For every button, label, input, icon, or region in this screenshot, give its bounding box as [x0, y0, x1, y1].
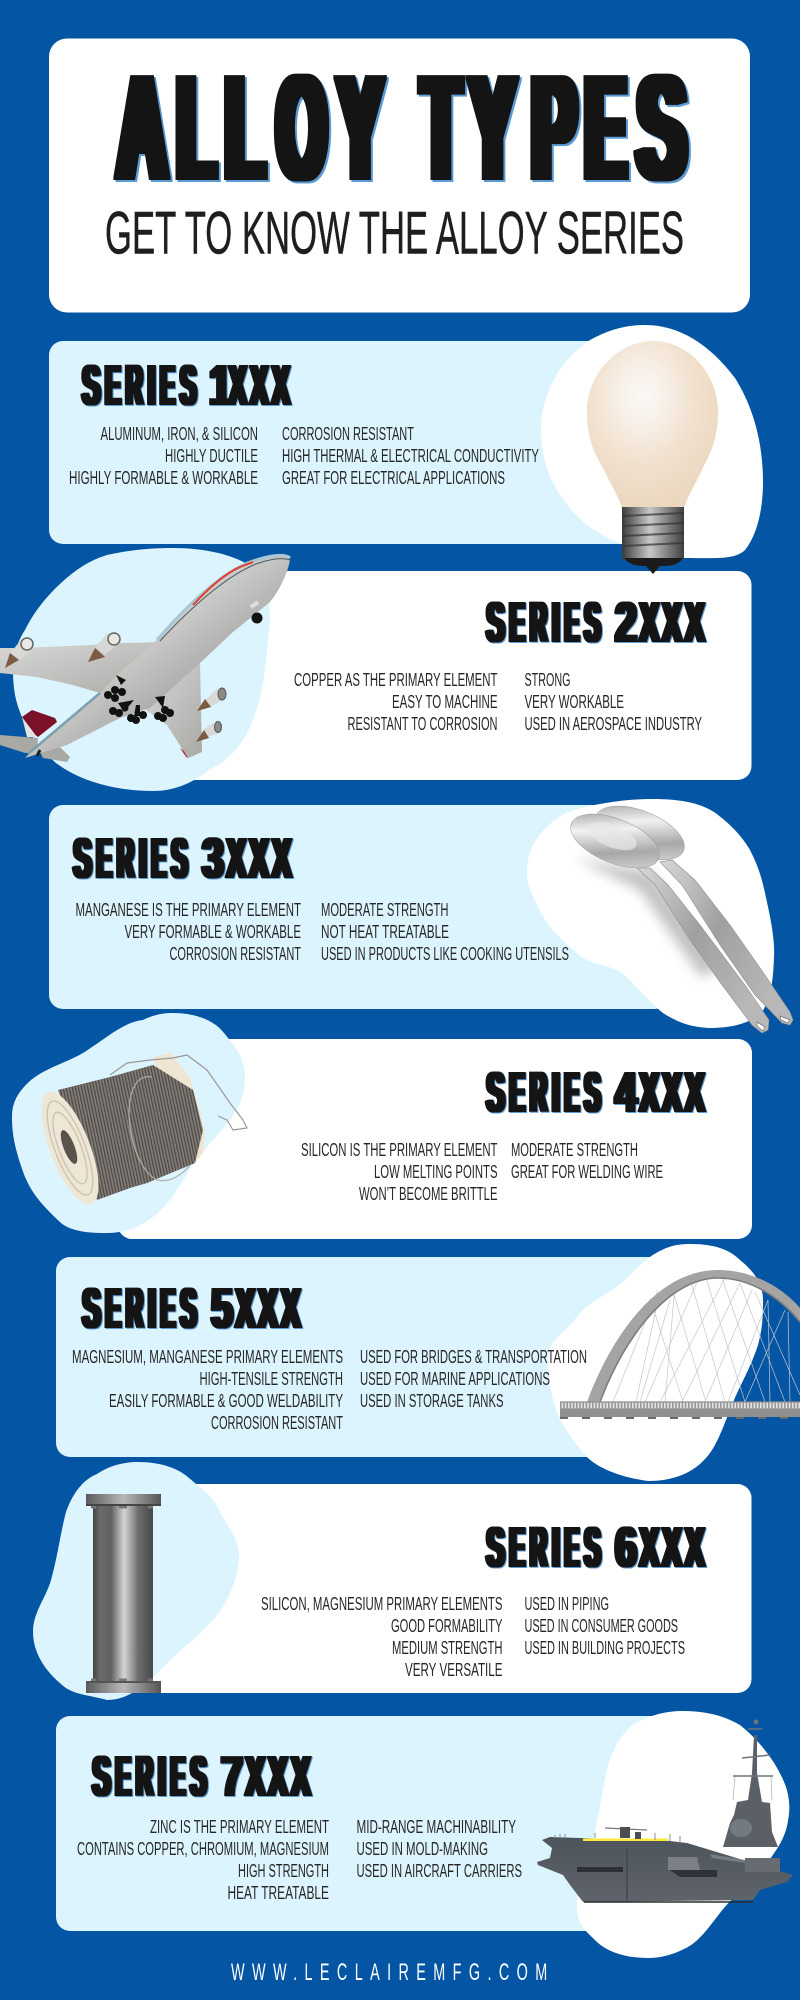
- list: properties: [69, 423, 539, 488]
- title: L: [177, 46, 215, 210]
- list: properties: [72, 1346, 587, 1433]
- heading: E: [105, 354, 120, 418]
- list: properties: GREAT FOR WELDING WIRE: [511, 1161, 663, 1182]
- heading: R: [126, 354, 142, 418]
- heading: I: [139, 826, 146, 890]
- heading: 2: [615, 590, 637, 654]
- heading: S: [180, 354, 196, 418]
- panel: series 1xxx: X: [272, 354, 290, 418]
- heading: E: [96, 826, 112, 890]
- list: properties: MODERATE STRENGTH: [511, 1139, 638, 1160]
- heading: X: [246, 1744, 265, 1808]
- heading: E: [160, 354, 174, 418]
- title: E: [586, 46, 625, 210]
- heading: S: [171, 826, 188, 890]
- heading: S: [584, 1516, 600, 1580]
- list: properties: HIGH STRENGTH: [238, 1860, 329, 1881]
- heading: R: [530, 590, 547, 654]
- heading: X: [227, 826, 246, 890]
- list: properties: USED IN MOLD-MAKING: [356, 1838, 488, 1859]
- blob: pipe backdrop: [33, 1462, 239, 1700]
- blob: spool backdrop: [12, 1013, 245, 1233]
- list: properties: VERY VERSATILE: [405, 1659, 502, 1680]
- list: properties: USED FOR BRIDGES & TRANSPORTATION: [360, 1346, 587, 1367]
- heading: S: [82, 354, 100, 418]
- panel: series 4xxx: [12, 1013, 752, 1239]
- panel: series 6xxx: X: [685, 1516, 704, 1580]
- title: Y: [470, 46, 515, 210]
- list: properties: MANGANESE IS THE PRIMARY ELEMENT: [76, 899, 301, 920]
- heading: 6: [615, 1516, 637, 1580]
- heading: X: [268, 1744, 287, 1808]
- panel: series 6xxx: [33, 1462, 752, 1700]
- heading: S: [584, 1060, 600, 1124]
- list: properties: EASILY FORMABLE & GOOD WELDABILITY: [109, 1390, 343, 1411]
- title: O: [277, 46, 326, 210]
- heading: X: [640, 1516, 659, 1580]
- heading: X: [236, 1276, 255, 1340]
- heading: S: [82, 1276, 100, 1340]
- icon: metal pipe: [86, 1494, 161, 1693]
- list: properties: [294, 669, 702, 734]
- list: properties: CONTAINS COPPER, CHROMIUM, MAGNESIUM: [77, 1838, 329, 1859]
- list: properties: HIGHLY DUCTILE: [165, 445, 258, 466]
- title: T: [422, 46, 460, 210]
- panel: series 3xxx: X: [272, 826, 291, 890]
- panel: series 5xxx: [56, 1244, 800, 1481]
- heading: I: [148, 1276, 156, 1340]
- heading: E: [510, 1060, 525, 1124]
- heading: 7: [221, 1744, 243, 1808]
- panel: series 7xxx: X: [291, 1744, 310, 1808]
- heading: R: [126, 1276, 143, 1340]
- heading: X: [250, 354, 268, 418]
- heading: I: [552, 1516, 560, 1580]
- list: properties: LOW MELTING POINTS: [374, 1161, 498, 1182]
- list: properties: MID-RANGE MACHINABILITY: [356, 1816, 516, 1837]
- list: properties: GREAT FOR ELECTRICAL APPLICATIONS: [282, 467, 505, 488]
- heading: S: [486, 1060, 504, 1124]
- heading: E: [565, 1516, 579, 1580]
- heading: I: [552, 1060, 560, 1124]
- list: properties: STRONG: [524, 669, 570, 690]
- list: properties: CORROSION RESISTANT: [211, 1412, 343, 1433]
- blob: plane backdrop: [13, 548, 270, 791]
- list: properties: RESISTANT TO CORROSION: [348, 713, 498, 734]
- list: properties: [76, 899, 569, 964]
- list: properties: HIGH THERMAL & ELECTRICAL CONDUCTIVITY: [282, 445, 539, 466]
- heading: R: [530, 1060, 547, 1124]
- list: properties: [77, 1816, 522, 1903]
- panel: series 4xxx: X: [685, 1060, 704, 1124]
- icon: airplane: [0, 555, 290, 762]
- list: properties: USED FOR MARINE APPLICATIONS: [360, 1368, 550, 1389]
- title: P: [532, 46, 576, 210]
- heading: S: [584, 590, 600, 654]
- icon: arch bridge: [560, 1270, 800, 1418]
- heading: X: [258, 1276, 277, 1340]
- list: properties: MAGNESIUM, MANGANESE PRIMARY ELEMENTS: [72, 1346, 343, 1367]
- list: properties: USED IN BUILDING PROJECTS: [524, 1637, 685, 1658]
- heading: I: [148, 354, 155, 418]
- list: properties: GOOD FORMABILITY: [391, 1615, 502, 1636]
- title: Y: [338, 46, 381, 210]
- list: properties: ALUMINUM, IRON, & SILICON: [100, 423, 258, 444]
- blob: bulb backdrop: [541, 325, 763, 558]
- heading: E: [171, 1744, 185, 1808]
- icon: light bulb: [587, 341, 718, 574]
- heading: X: [249, 826, 268, 890]
- heading: E: [510, 590, 525, 654]
- list: properties: USED IN PRODUCTS LIKE COOKING UTENSILS: [321, 943, 569, 964]
- list: properties: USED IN CONSUMER GOODS: [524, 1615, 678, 1636]
- list: properties: MODERATE STRENGTH: [321, 899, 448, 920]
- heading: S: [486, 1516, 504, 1580]
- heading: X: [229, 354, 246, 418]
- heading: I: [552, 590, 560, 654]
- icon: spoons: [563, 795, 793, 1033]
- title: L: [226, 46, 264, 210]
- panel: series 2xxx: [0, 548, 752, 791]
- heading: I: [158, 1744, 166, 1808]
- panel: title header: S: [637, 46, 686, 210]
- heading: 5: [211, 1276, 233, 1340]
- panel: title header: [49, 38, 750, 312]
- list: properties: [301, 1139, 663, 1204]
- heading: X: [662, 590, 681, 654]
- list: properties: HIGHLY FORMABLE & WORKABLE: [69, 467, 258, 488]
- list: properties: ZINC IS THE PRIMARY ELEMENT: [150, 1816, 329, 1837]
- list: properties: EASY TO MACHINE: [392, 691, 498, 712]
- panel: series 7xxx: [56, 1711, 793, 1958]
- heading: X: [662, 1060, 681, 1124]
- panel: series 3xxx: [49, 795, 793, 1033]
- list: properties: MEDIUM STRENGTH: [392, 1637, 502, 1658]
- heading: E: [565, 590, 579, 654]
- list: properties: CORROSION RESISTANT: [282, 423, 414, 444]
- list: properties: USED IN AIRCRAFT CARRIERS: [356, 1860, 522, 1881]
- heading: E: [565, 1060, 579, 1124]
- list: properties: SILICON IS THE PRIMARY ELEMENT: [301, 1139, 498, 1160]
- landing gear: [104, 612, 262, 724]
- blob: bridge backdrop: [548, 1244, 763, 1481]
- title: A: [118, 46, 166, 210]
- list: properties: HEAT TREATABLE: [228, 1882, 329, 1903]
- list: properties: USED IN PIPING: [524, 1593, 609, 1614]
- heading: R: [136, 1744, 153, 1808]
- heading: X: [640, 590, 659, 654]
- heading: E: [106, 1276, 121, 1340]
- list: properties: WON’T BECOME BRITTLE: [359, 1183, 498, 1204]
- list: properties: CORROSION RESISTANT: [170, 943, 301, 964]
- list: properties: NOT HEAT TREATABLE: [321, 921, 449, 942]
- heading: S: [180, 1276, 196, 1340]
- panel: series 1xxx: [49, 325, 763, 574]
- heading: S: [92, 1744, 110, 1808]
- list: properties: COPPER AS THE PRIMARY ELEMENT: [294, 669, 498, 690]
- heading: X: [662, 1516, 681, 1580]
- heading: E: [116, 1744, 131, 1808]
- heading: S: [190, 1744, 206, 1808]
- heading: E: [510, 1516, 525, 1580]
- heading: R: [530, 1516, 547, 1580]
- heading: 1: [209, 354, 232, 418]
- heading: 3: [202, 826, 224, 890]
- icon: wire spool: [30, 1053, 247, 1211]
- blob: spoons backdrop: [527, 799, 774, 1028]
- blob: carrier backdrop: [577, 1711, 789, 1958]
- list: properties: USED IN STORAGE TANKS: [360, 1390, 504, 1411]
- heading: R: [117, 826, 134, 890]
- engines: [5, 633, 227, 742]
- list: properties: [261, 1593, 685, 1680]
- heading: E: [152, 826, 166, 890]
- panel: series 5xxx: X: [281, 1276, 300, 1340]
- list: properties: VERY FORMABLE & WORKABLE: [124, 921, 301, 942]
- heading: S: [73, 826, 92, 890]
- heading: S: [486, 590, 504, 654]
- heading: E: [161, 1276, 175, 1340]
- heading: X: [640, 1060, 659, 1124]
- footer: website: WWW.LECLAIREMFG.COM: [231, 1959, 547, 1986]
- heading: 4: [615, 1060, 637, 1124]
- list: properties: HIGH-TENSILE STRENGTH: [200, 1368, 343, 1389]
- icon: aircraft carrier: [537, 1720, 793, 1902]
- panel: series 2xxx: X: [685, 590, 704, 654]
- list: properties: SILICON, MAGNESIUM PRIMARY ELEMENTS: [261, 1593, 502, 1614]
- list: properties: VERY WORKABLE: [524, 691, 624, 712]
